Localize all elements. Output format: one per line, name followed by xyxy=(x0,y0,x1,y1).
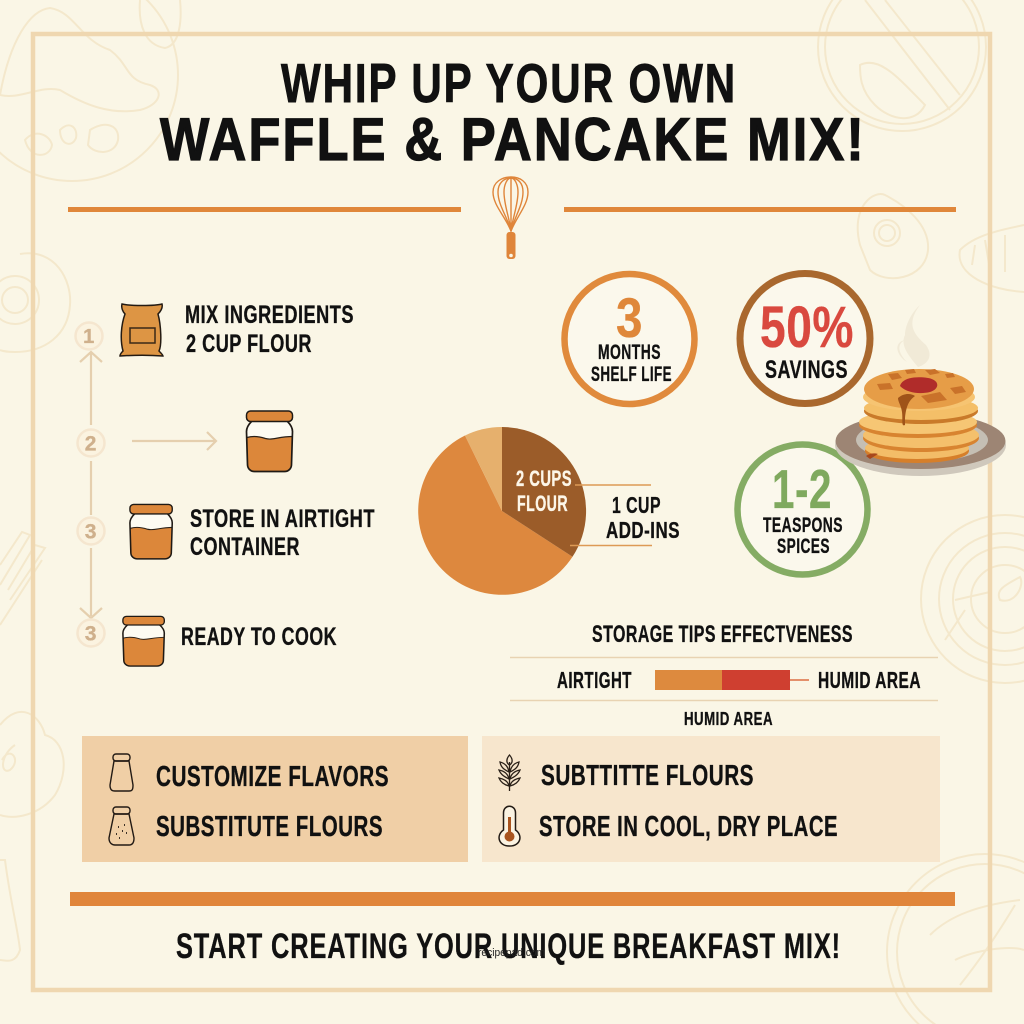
stat: spices xyxy=(738,444,868,574)
process timeline xyxy=(76,301,375,666)
stat: shelf life xyxy=(564,274,694,404)
pie labels: ADD-INS xyxy=(606,517,680,543)
light slice xyxy=(465,427,502,511)
label: airtight: AIRTIGHT xyxy=(557,667,632,693)
text: substitute flours: SUBSTITUTE FLOURS xyxy=(156,811,383,843)
illustration: pancake stack xyxy=(835,305,1006,476)
caption: humid area: HUMID AREA xyxy=(684,708,773,729)
divider left xyxy=(68,207,461,212)
leader lines xyxy=(570,485,652,546)
step number 2: 2 xyxy=(85,432,97,456)
step number 3 xyxy=(78,518,104,544)
pie labels xyxy=(516,466,680,543)
icon: thermometer xyxy=(499,806,520,846)
text: store in airtight container: CONTAINER xyxy=(190,533,300,561)
text: mix ingredients: MIX INGREDIENTS xyxy=(185,301,354,329)
panel: customize xyxy=(82,736,468,862)
steam xyxy=(897,305,930,367)
icon: flour sack xyxy=(120,304,163,356)
pie labels: 1 CUP xyxy=(612,492,661,518)
pie labels: 2 CUPS xyxy=(516,466,572,491)
title: WHIP UP YOUR OWN xyxy=(281,52,737,114)
icon: wheat xyxy=(499,755,520,791)
text: store in cool dry place: STORE IN COOL, DRY PLACE xyxy=(539,811,838,843)
panel: storage xyxy=(482,736,940,862)
icon: shaker xyxy=(110,754,133,791)
mid slice xyxy=(418,436,572,595)
divider right xyxy=(564,207,956,212)
icon: spice shaker xyxy=(109,807,134,845)
syrup and jam xyxy=(900,377,937,393)
watermark: recipepad.com xyxy=(478,947,545,959)
text: ready to cook: READY TO COOK xyxy=(181,623,337,651)
step number 1: 1 xyxy=(83,326,95,348)
waffle squares xyxy=(877,369,966,403)
title xyxy=(160,52,866,173)
text: store in airtight container xyxy=(190,505,375,561)
stat: spices: SPICES xyxy=(777,535,830,558)
stat: shelf life: 3 xyxy=(616,286,643,349)
pie labels: FLOUR xyxy=(517,491,568,516)
step number 1 xyxy=(76,322,102,350)
stat: savings xyxy=(740,274,870,404)
text: mix ingredients xyxy=(185,301,354,358)
stat: spices: TEASPONS xyxy=(763,514,843,537)
stat: spices: 1-2 xyxy=(772,458,832,520)
text: customize flavors: CUSTOMIZE FLAVORS xyxy=(156,761,389,793)
storage tips chart xyxy=(510,621,938,729)
icon: airtight jar xyxy=(130,504,172,559)
icon: whisk xyxy=(493,177,528,259)
chart heading: STORAGE TIPS EFFECTVENESS xyxy=(592,621,853,648)
bar xyxy=(655,670,809,690)
plate xyxy=(835,413,1006,476)
text: mix ingredients: 2 CUP FLOUR xyxy=(186,330,312,358)
text: store in airtight container: STORE IN AIRTIGHT xyxy=(190,505,375,533)
stat: shelf life: SHELF LIFE xyxy=(591,363,672,386)
stat: shelf life: MONTHS xyxy=(598,341,661,364)
step number 3 again xyxy=(78,620,104,646)
footer bar xyxy=(70,892,955,906)
step number 3 again: 3 xyxy=(85,622,97,646)
stat: savings: SAVINGS xyxy=(765,356,848,384)
stat: savings: 50% xyxy=(760,295,854,360)
step number 3: 3 xyxy=(85,520,97,544)
text: subttitte flours: SUBTTITTE FLOURS xyxy=(541,760,754,792)
connector lines xyxy=(80,352,216,618)
title: WAFFLE & PANCAKE MIX! xyxy=(160,106,866,173)
pancake layers xyxy=(859,369,979,463)
pie chart xyxy=(418,427,680,595)
dark slice xyxy=(502,427,586,557)
icon: jar xyxy=(246,411,292,472)
step number 2 xyxy=(78,430,104,456)
label: humid area: HUMID AREA xyxy=(818,667,921,693)
icon: ready jar xyxy=(123,616,164,666)
